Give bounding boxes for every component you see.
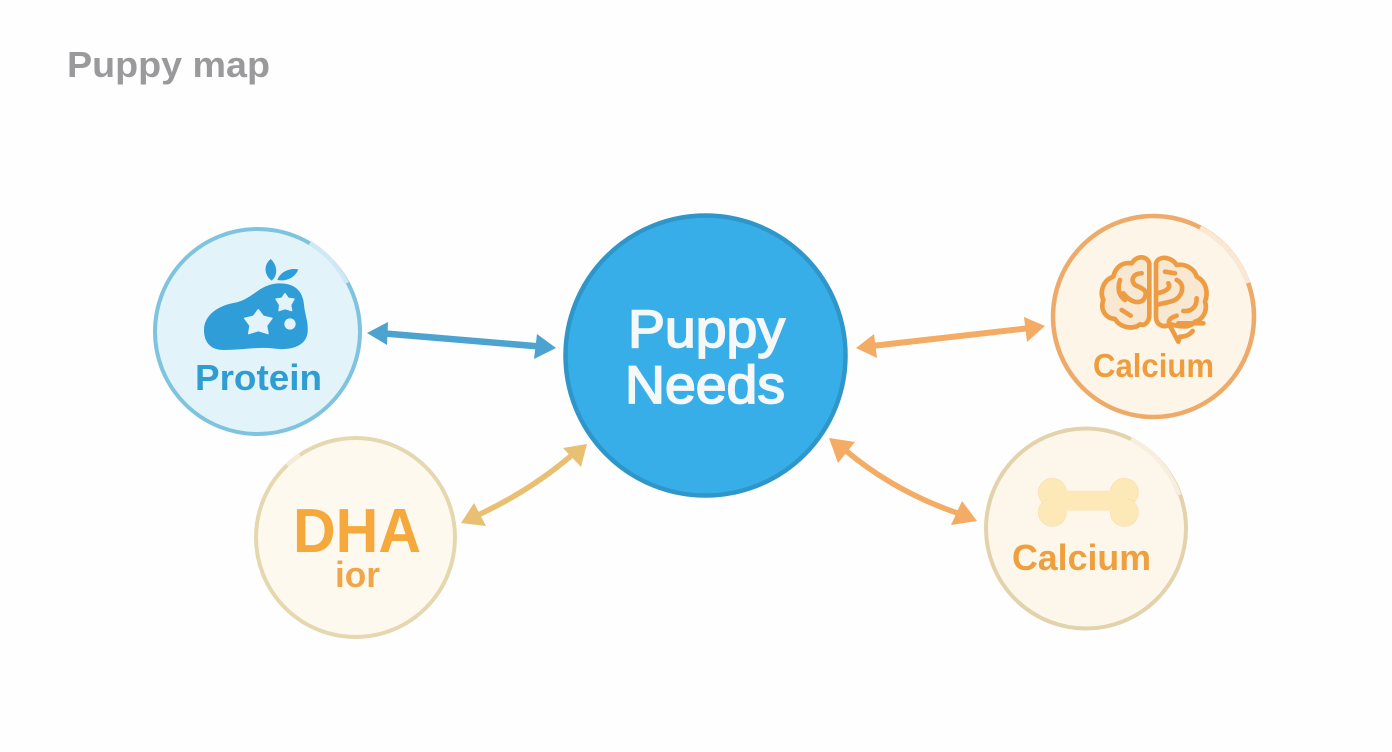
arrow: protein to puppy needs <box>367 322 556 359</box>
panel: DHA node <box>256 438 455 637</box>
title: Puppy map <box>67 44 270 85</box>
heading: puppy needs: Puppy <box>628 300 786 359</box>
icon: bone <box>1038 478 1138 526</box>
panel: calcium brain node <box>1053 216 1254 417</box>
panel: central puppy needs circle <box>566 216 846 496</box>
label: ior: ior <box>335 554 380 595</box>
label: calcium: Calcium <box>1012 537 1151 578</box>
label: DHA: DHA <box>293 497 421 566</box>
heading: puppy needs: Needs <box>625 356 785 415</box>
label: protein: Protein <box>195 357 322 398</box>
arrow: puppy needs to calcium bone <box>829 438 977 525</box>
panel: calcium bone node <box>986 428 1186 628</box>
icon: brain <box>1102 257 1207 342</box>
arrow: puppy needs to calcium brain <box>856 317 1045 358</box>
arrow: DHA to puppy needs <box>461 444 587 526</box>
panel: protein node <box>155 229 360 434</box>
icon: protein food blob with leaves <box>204 259 308 350</box>
label: calcium: Calcium <box>1093 347 1214 384</box>
